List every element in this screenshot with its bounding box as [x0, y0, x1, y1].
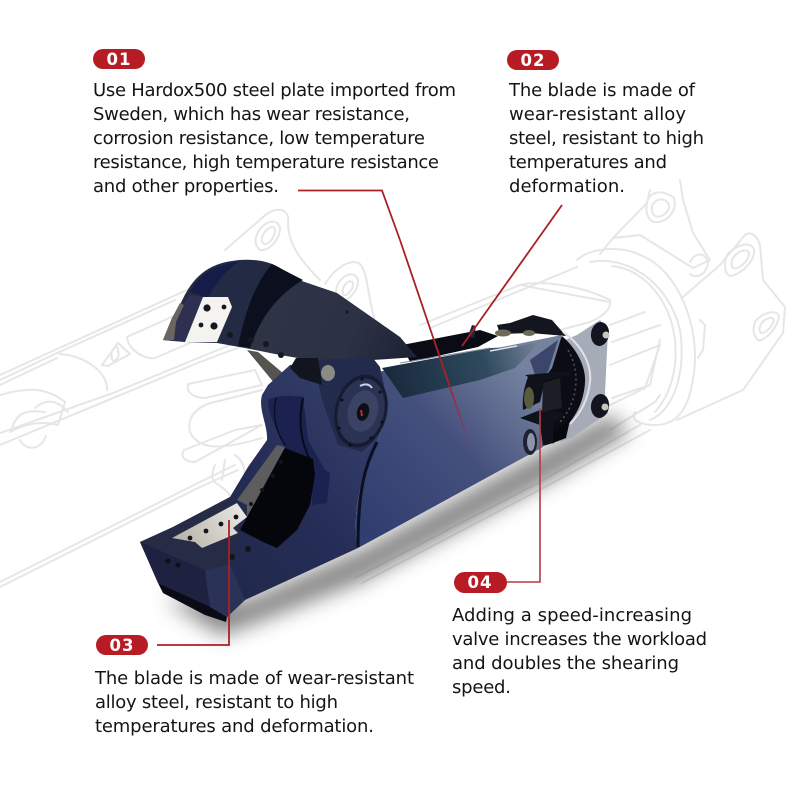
text 03: alloy steel, resistant to high: [95, 692, 338, 713]
pin bolt: [321, 365, 335, 381]
lower steel blade insert: [172, 503, 247, 548]
upper jaw tip: [163, 260, 293, 348]
leader line 03: [157, 520, 229, 645]
text 01: and other properties.: [93, 176, 279, 197]
text 02: The blade is made of: [508, 80, 696, 101]
rotation ring: [563, 332, 590, 424]
text 02: [508, 80, 704, 197]
ghost: rotary flange: [577, 249, 695, 425]
shear machine: [140, 260, 611, 622]
text 01: Use Hardox500 steel plate imported from: [93, 80, 456, 101]
ghost: central linkage: [188, 370, 262, 398]
top cover plate: [382, 341, 540, 398]
nose top face: [140, 497, 240, 570]
pivot flange: [327, 369, 395, 453]
rear mounting plate: [560, 320, 608, 442]
top rim hardware: [497, 315, 566, 336]
leader line 02: [462, 205, 562, 346]
text 04: and doubles the shearing: [452, 653, 679, 674]
text 02: steel, resistant to high: [509, 128, 704, 149]
text 02: deformation.: [509, 176, 625, 197]
lower throat opening: [240, 448, 315, 548]
callout 03: [94, 635, 414, 737]
leader line 01: [298, 190, 472, 452]
text 02: wear-resistant alloy: [509, 104, 686, 125]
badge 04: [454, 572, 507, 593]
leader line 04: [507, 408, 540, 582]
jaw wear edge: [163, 295, 203, 342]
badge 02: 02: [521, 51, 545, 70]
callout 01: [93, 49, 456, 197]
text 04: [452, 605, 707, 698]
ghost line drawing of the shear: [0, 180, 785, 587]
body opening: [402, 330, 498, 362]
nose front face: [140, 542, 210, 607]
jaw steel blade insert: [185, 297, 232, 342]
ghost: side plate with two eyes: [677, 233, 785, 420]
callout 04: [452, 572, 707, 698]
text 02: temperatures and: [509, 152, 667, 173]
badge 02: [507, 50, 559, 70]
pivot link plate: [313, 357, 387, 452]
text 01: corrosion resistance, low temperature: [93, 128, 425, 149]
ghost: top lugs: [225, 210, 320, 280]
mounting bolts: [589, 321, 611, 419]
upper wedge blade: [247, 350, 303, 397]
front section of the frame: [140, 360, 385, 617]
text 01: Sweden, which has wear resistance,: [93, 104, 410, 125]
badge 03: 03: [110, 636, 134, 655]
main side panel: [356, 335, 562, 548]
upper jaw plate: [245, 278, 417, 360]
text 03: temperatures and deformation.: [95, 716, 374, 737]
badge 01: [93, 49, 145, 69]
text 03: [94, 668, 414, 737]
hydraulic window: [520, 371, 570, 446]
lower long blade: [237, 445, 285, 517]
text 04: Adding a speed-increasing: [452, 605, 692, 626]
text 01: resistance, high temperature resistance: [93, 152, 439, 173]
seam: [358, 442, 377, 547]
text 04: speed.: [452, 677, 511, 698]
badge 03: [96, 635, 148, 655]
round port: [523, 429, 537, 455]
text 03: The blade is made of wear-resistant: [94, 668, 414, 689]
callout 02: [507, 50, 704, 197]
badge 04: 04: [468, 573, 492, 592]
badge 01: 01: [107, 50, 131, 69]
pivot lobes: [268, 396, 330, 505]
ghost: rear rails: [420, 267, 610, 330]
ground shadow under the machine: [165, 415, 630, 636]
text 01: [93, 80, 456, 197]
text 04: valve increases the workload: [452, 629, 707, 650]
